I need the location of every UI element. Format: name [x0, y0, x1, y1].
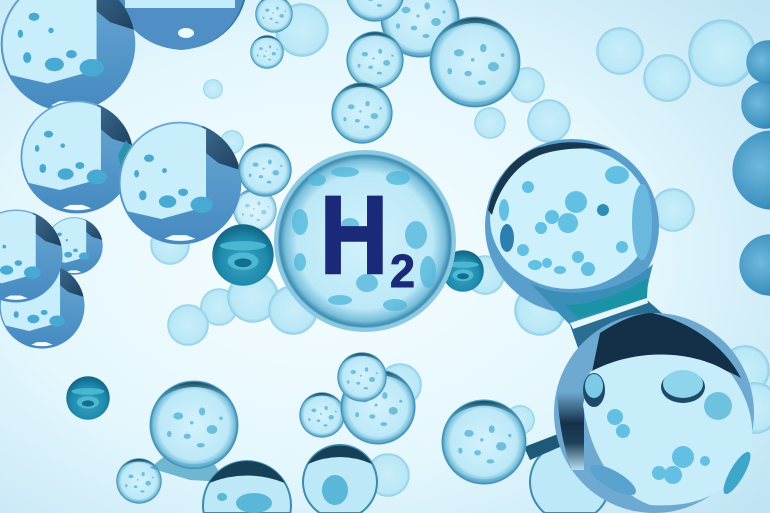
large H2 bubble [274, 150, 456, 332]
top left bubbles [0, 0, 293, 286]
bottom centre molecules [299, 352, 610, 513]
upper sphere [485, 139, 659, 313]
small teal bubble beside H2 [442, 250, 484, 292]
neck [530, 264, 672, 368]
top centre bubbles [331, 0, 521, 144]
large hydrogen molecule right [485, 139, 755, 513]
left edge bubbles [0, 209, 103, 349]
H2 label: 2 [390, 245, 415, 297]
pale background bubbles [150, 3, 770, 497]
bottom left molecules [66, 376, 291, 513]
right edge bubbles [732, 40, 770, 296]
H2 label: H [320, 174, 388, 297]
lower sphere [554, 313, 755, 513]
